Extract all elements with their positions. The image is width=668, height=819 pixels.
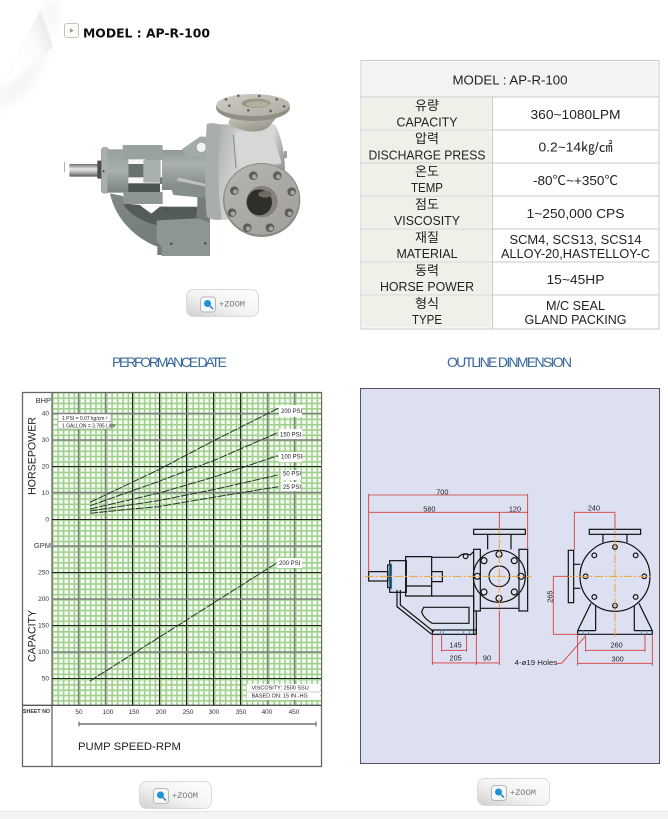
icon: magnifier (200, 297, 216, 312)
row: temp: 온도 (415, 164, 439, 179)
row: viscosity: VISCOSITY (394, 213, 460, 228)
row: viscosity (394, 197, 625, 228)
x axis labels: 150 (129, 709, 140, 716)
curve labels: 200 PSI (281, 409, 303, 415)
axis title: pump speed: PUMP SPEED-RPM (78, 741, 181, 753)
outline dimension panel (360, 388, 660, 764)
x axis labels: 350 (236, 709, 247, 716)
y axis labels (34, 396, 51, 682)
dimension values: 300 (612, 655, 624, 664)
row: type: TYPE (412, 312, 442, 327)
row: discharge press: 0.2~14㎏/㎠ (538, 140, 612, 156)
x axis labels: 200 (156, 709, 167, 716)
row: type: M/C SEAL (546, 298, 605, 313)
viscosity note: VISCOSITY: 2500 SSU (252, 686, 309, 692)
row: horse power: HORSE POWER (380, 279, 474, 294)
row: viscosity: 점도 (415, 197, 439, 212)
y axis labels: 40 (42, 410, 49, 418)
zoom button: outline drawing (478, 778, 550, 806)
y axis labels: 50 (42, 676, 49, 682)
front view pump (568, 529, 652, 634)
curve labels: 150 PSI (280, 432, 302, 438)
row: type: GLAND PACKING (524, 312, 626, 327)
row: viscosity: 1~250,000 CPS (526, 206, 625, 221)
curve labels: 200 PSI (279, 561, 301, 567)
row: material: SCM4, SCS13, SCS14 (510, 232, 642, 247)
axis title: horsepower: HORSEPOWER (26, 417, 38, 495)
dimension values: 90 (483, 654, 491, 663)
dimension values: 240 (588, 504, 600, 513)
zoom button: outline drawing: +ZOOM (510, 788, 536, 798)
row: type (412, 296, 626, 327)
table header row (362, 62, 658, 96)
performance chart (22, 392, 322, 766)
row: capacity: 유량 (415, 98, 439, 113)
row: material: MATERIAL (396, 246, 458, 261)
dimension values: 265 (546, 591, 555, 603)
dimension values (423, 487, 624, 667)
zoom button: chart: +ZOOM (172, 791, 198, 801)
side view blue bolts (390, 563, 469, 634)
pump photograph illustration (64, 94, 300, 256)
dimension values: 700 (436, 487, 448, 496)
table header row: MODEL : AP-R-100 (452, 72, 568, 88)
icon: magnifier (154, 788, 168, 804)
pump bracket (110, 193, 210, 256)
row: discharge press: DISCHARGE PRESS (368, 148, 486, 162)
pump left part: shaft, bearing housing and bracket (64, 137, 210, 256)
zoom button: product photo: +ZOOM (219, 300, 245, 310)
y axis labels: 0 (45, 516, 49, 524)
x axis labels: 100 (103, 709, 114, 716)
sheet number label: SHEET NO (23, 709, 50, 715)
page corner curl decoration (0, 0, 60, 112)
dimension values: 120 (509, 505, 521, 514)
x axis labels (75, 709, 300, 716)
y axis labels: 10 (42, 490, 49, 497)
conversion note: 1 GALLON = 3.785 Liter (62, 424, 116, 430)
row: material: 재질 (415, 230, 439, 245)
y axis labels: 30 (42, 437, 49, 444)
heading: outline dimension: OUTLINE DINMENSION (447, 354, 572, 370)
dimension values: 580 (423, 504, 435, 513)
row: capacity: CAPACITY (396, 114, 458, 130)
dimension values: 145 (450, 641, 462, 650)
front flange (223, 163, 300, 237)
dimension values: 205 (450, 654, 462, 663)
axis title: capacity: CAPACITY (26, 609, 38, 662)
row: material (396, 230, 650, 261)
row: capacity (396, 98, 620, 130)
y axis labels: 100 (38, 649, 49, 656)
row: horse power: 15~45HP (546, 272, 604, 287)
rpm range bar (79, 722, 316, 726)
pump casing (205, 123, 287, 220)
curve labels (277, 405, 303, 568)
row: horse power: 동력 (415, 263, 439, 278)
icon: magnifier (492, 786, 506, 800)
x axis labels: 50 (75, 709, 83, 716)
conversion note (58, 414, 116, 430)
curve labels: 100 PSI (281, 454, 303, 460)
neck (228, 118, 276, 132)
row: material: ALLOY-20,HASTELLOY-C (501, 246, 650, 261)
horsepower curves (90, 408, 278, 513)
heading: performance date: PERFORMANCE DATE (112, 354, 227, 370)
zoom button: chart (140, 782, 212, 808)
row: temp: -80℃~+350℃ (533, 173, 618, 188)
row: horse power (380, 263, 604, 294)
capacity curve (90, 562, 278, 681)
bottom page strip (0, 811, 668, 819)
red dimension lines (369, 494, 652, 666)
row: capacity: 360~1080LPM (530, 107, 620, 122)
zoom button: product photo (186, 290, 258, 316)
chart major grid (52, 393, 321, 705)
y axis labels: 150 (38, 622, 49, 630)
pump shaft (69, 161, 102, 179)
curve labels: 25 PSI (283, 485, 301, 491)
row: discharge press (368, 131, 612, 162)
conversion note: 1 PSI = 0.07 kg/cm ² (62, 416, 108, 422)
viscosity note: BASED ON: 15 IN.-HG (252, 694, 308, 700)
front view blue bolts (583, 630, 647, 634)
x axis labels: 450 (289, 709, 300, 716)
row: type: 형식 (415, 296, 439, 311)
pump right part: casing and flanges (205, 94, 300, 237)
side view pump (369, 529, 528, 634)
x axis labels: 400 (262, 709, 273, 716)
dimension values: 4-ø19 Holes (515, 658, 558, 667)
bearing housing and yoke (101, 137, 210, 204)
y axis labels: BHP (36, 396, 51, 405)
y axis labels: 20 (42, 464, 49, 470)
title: model heading: MODEL : AP-R-100 (83, 26, 210, 40)
x axis labels: 300 (209, 709, 220, 716)
viscosity note (247, 684, 320, 700)
top flange (216, 94, 290, 121)
row: discharge press: 압력 (415, 131, 439, 146)
dimension values: 260 (611, 641, 623, 650)
y axis labels: GPM (34, 541, 51, 550)
y axis labels: 200 (38, 596, 49, 603)
orange centre lines (365, 525, 652, 638)
y axis labels: 250 (38, 570, 49, 576)
dimension drawing (365, 487, 652, 667)
x axis labels: 250 (183, 709, 194, 716)
curve labels: 50 PSI (283, 472, 301, 478)
specification table (361, 60, 659, 329)
row: temp: TEMP (411, 180, 443, 195)
row: temp (411, 164, 618, 195)
